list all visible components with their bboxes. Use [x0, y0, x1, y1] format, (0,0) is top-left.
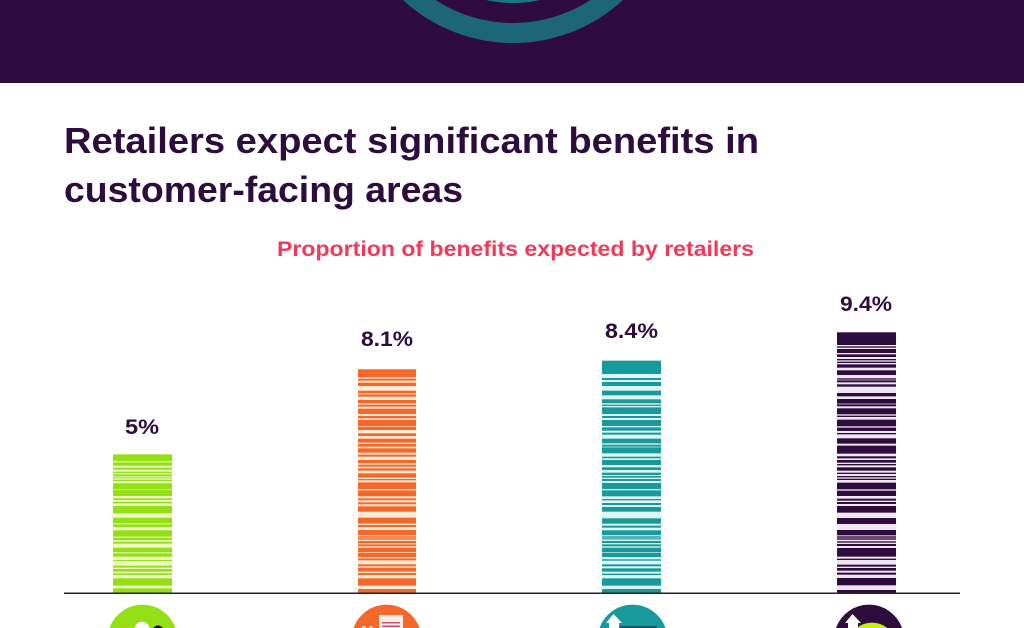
header band	[0, 0, 1024, 83]
icon: arrow with lime disc (purple circle)	[836, 605, 902, 628]
bar: 8.4% teal	[602, 361, 661, 593]
bar: 5% green	[113, 454, 172, 593]
axis line	[64, 592, 960, 594]
icon: people (green circle)	[110, 605, 176, 628]
icon: concentric rings	[403, 0, 623, 43]
value label: 8.1%: 8.1%	[361, 328, 413, 351]
bar chart	[64, 293, 960, 594]
value label: 5%: 5%	[125, 416, 159, 439]
icon: document (orange circle)	[354, 605, 420, 628]
value label: 9.4%: 9.4%	[840, 293, 892, 316]
title: Retailers expect significant benefits in	[64, 120, 759, 161]
icon: screen with arrow (teal circle)	[600, 605, 666, 628]
chart subtitle: Proportion of benefits expected by retailers	[277, 238, 754, 261]
bar: 9.4% purple	[837, 332, 896, 594]
title: customer-facing areas	[64, 169, 463, 210]
title	[64, 120, 759, 210]
bar: 8.1% orange	[358, 369, 416, 593]
value label: 8.4%: 8.4%	[605, 320, 658, 343]
